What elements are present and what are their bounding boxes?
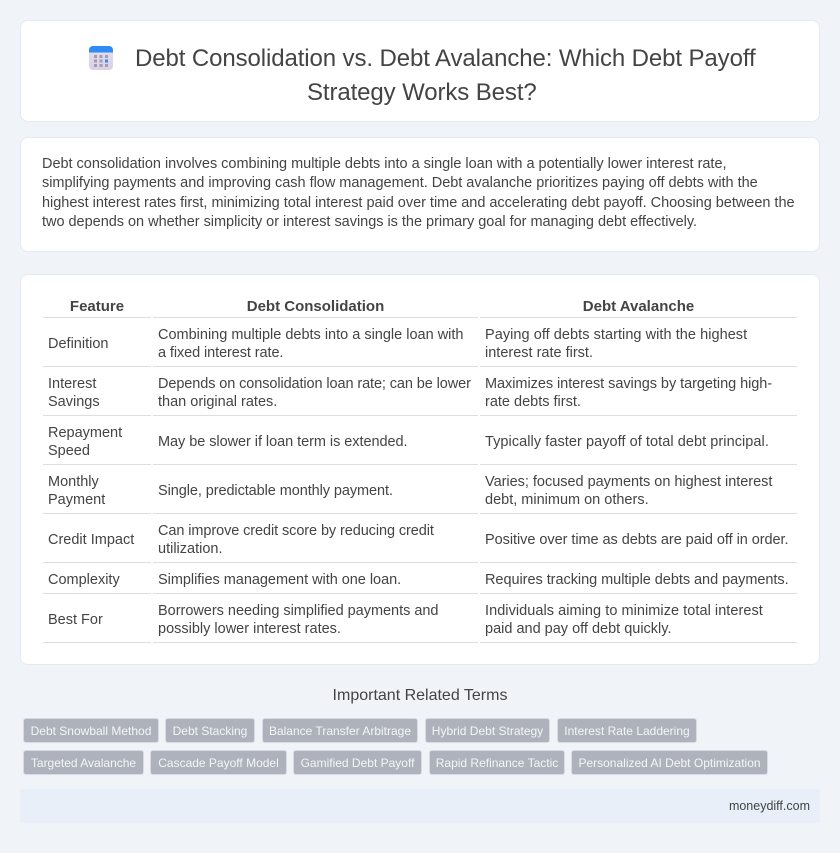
- related terms tags: Interest Rate Laddering: [564, 724, 690, 738]
- row: monthly payment: Single, predictable monthly payment.: [158, 483, 393, 499]
- related terms tags: Rapid Refinance Tactic: [436, 756, 558, 770]
- row: definition: Definition: [48, 336, 108, 352]
- panel: header: [20, 20, 820, 122]
- panel: header: Strategy Works Best?: [307, 79, 537, 106]
- row: interest savings: rate debts first.: [485, 394, 581, 410]
- row: credit impact: [48, 523, 789, 557]
- related terms tags: Personalized AI Debt Optimization: [578, 756, 761, 770]
- row: interest savings: than original rates.: [158, 394, 277, 410]
- footer text: moneydiff.com: [729, 799, 810, 813]
- row: best for: Individuals aiming to minimize total interest: [485, 603, 763, 619]
- row: definition: Combining multiple debts into a single loan with: [158, 327, 463, 343]
- title: Debt Consolidation vs. Debt Avalanche: Which Debt Payoff: [135, 45, 756, 72]
- heading: related terms: Important Related Terms: [333, 687, 507, 704]
- row: monthly payment: Varies; focused payments on highest interest: [485, 474, 772, 490]
- row: definition: interest rate first.: [485, 345, 593, 361]
- row: definition: Paying off debts starting with the highest: [485, 327, 747, 343]
- row: credit impact: Positive over time as debts are paid off in order.: [485, 532, 789, 548]
- panel: comparison table: [20, 274, 820, 665]
- row: credit impact: utilization.: [158, 541, 222, 557]
- row: complexity: Complexity: [48, 572, 120, 588]
- row: repayment speed: Typically faster payoff of total debt principal.: [485, 434, 769, 450]
- row: interest savings: [48, 376, 772, 410]
- related terms tags: Targeted Avalanche: [31, 756, 136, 770]
- related terms tags: Gamified Debt Payoff: [301, 756, 414, 770]
- table header: Debt Avalanche: [583, 298, 694, 315]
- row: credit impact: Can improve credit score by reducing credit: [158, 523, 434, 539]
- row: complexity: [48, 572, 789, 588]
- row: best for: Best For: [48, 612, 103, 628]
- row: best for: [48, 603, 763, 637]
- row: credit impact: Credit Impact: [48, 532, 134, 548]
- row: monthly payment: [48, 474, 772, 508]
- text block: introduction: [42, 156, 795, 230]
- related terms tags: Cascade Payoff Model: [158, 756, 279, 770]
- table header: Feature: [70, 298, 124, 315]
- panel: introduction: [20, 137, 820, 252]
- row: interest savings: Maximizes interest savings by targeting high-: [485, 376, 772, 392]
- row: monthly payment: Payment: [48, 492, 105, 508]
- row: best for: paid and pay off debt quickly.: [485, 621, 671, 637]
- row: complexity: Simplifies management with one loan.: [158, 572, 401, 588]
- related terms tags: [23, 718, 768, 775]
- text block: introduction: simplifying payments and improving cash flow management. Debt avalanche prioritizes paying off debts with the: [42, 175, 758, 191]
- related terms tags: Hybrid Debt Strategy: [432, 724, 543, 738]
- row: interest savings: Interest: [48, 376, 96, 392]
- row: definition: [48, 327, 748, 361]
- table header: [70, 298, 694, 315]
- footer: [20, 789, 820, 823]
- row: repayment speed: Repayment: [48, 425, 122, 441]
- row: interest savings: Depends on consolidation loan rate; can be lower: [158, 376, 471, 392]
- related terms tags: Debt Snowball Method: [31, 724, 151, 738]
- icon: calendar: [89, 46, 113, 70]
- text block: introduction: two depends on whether simplicity or interest savings is the primary goal for managing debt effectively.: [42, 214, 697, 230]
- row: interest savings: Savings: [48, 394, 100, 410]
- row: repayment speed: May be slower if loan term is extended.: [158, 434, 408, 450]
- row: best for: possibly lower interest rates.: [158, 621, 341, 637]
- row: monthly payment: Monthly: [48, 474, 99, 490]
- table header: Debt Consolidation: [247, 298, 384, 315]
- related terms tags: Balance Transfer Arbitrage: [269, 724, 411, 738]
- text block: introduction: Debt consolidation involves combining multiple debts into a single loan with a potentially lower interest rate,: [42, 156, 726, 172]
- row: definition: a fixed interest rate.: [158, 345, 283, 361]
- row: complexity: Requires tracking multiple debts and payments.: [485, 572, 789, 588]
- row: repayment speed: Speed: [48, 443, 90, 459]
- text block: introduction: highest interest rates first, minimizing total interest paid over time and accelerating debt payoff. Choosing between the: [42, 194, 795, 210]
- row: best for: Borrowers needing simplified payments and: [158, 603, 438, 619]
- row: repayment speed: [48, 425, 769, 459]
- related terms tags: Debt Stacking: [173, 724, 247, 738]
- row: monthly payment: debt, minimum on others.: [485, 492, 649, 508]
